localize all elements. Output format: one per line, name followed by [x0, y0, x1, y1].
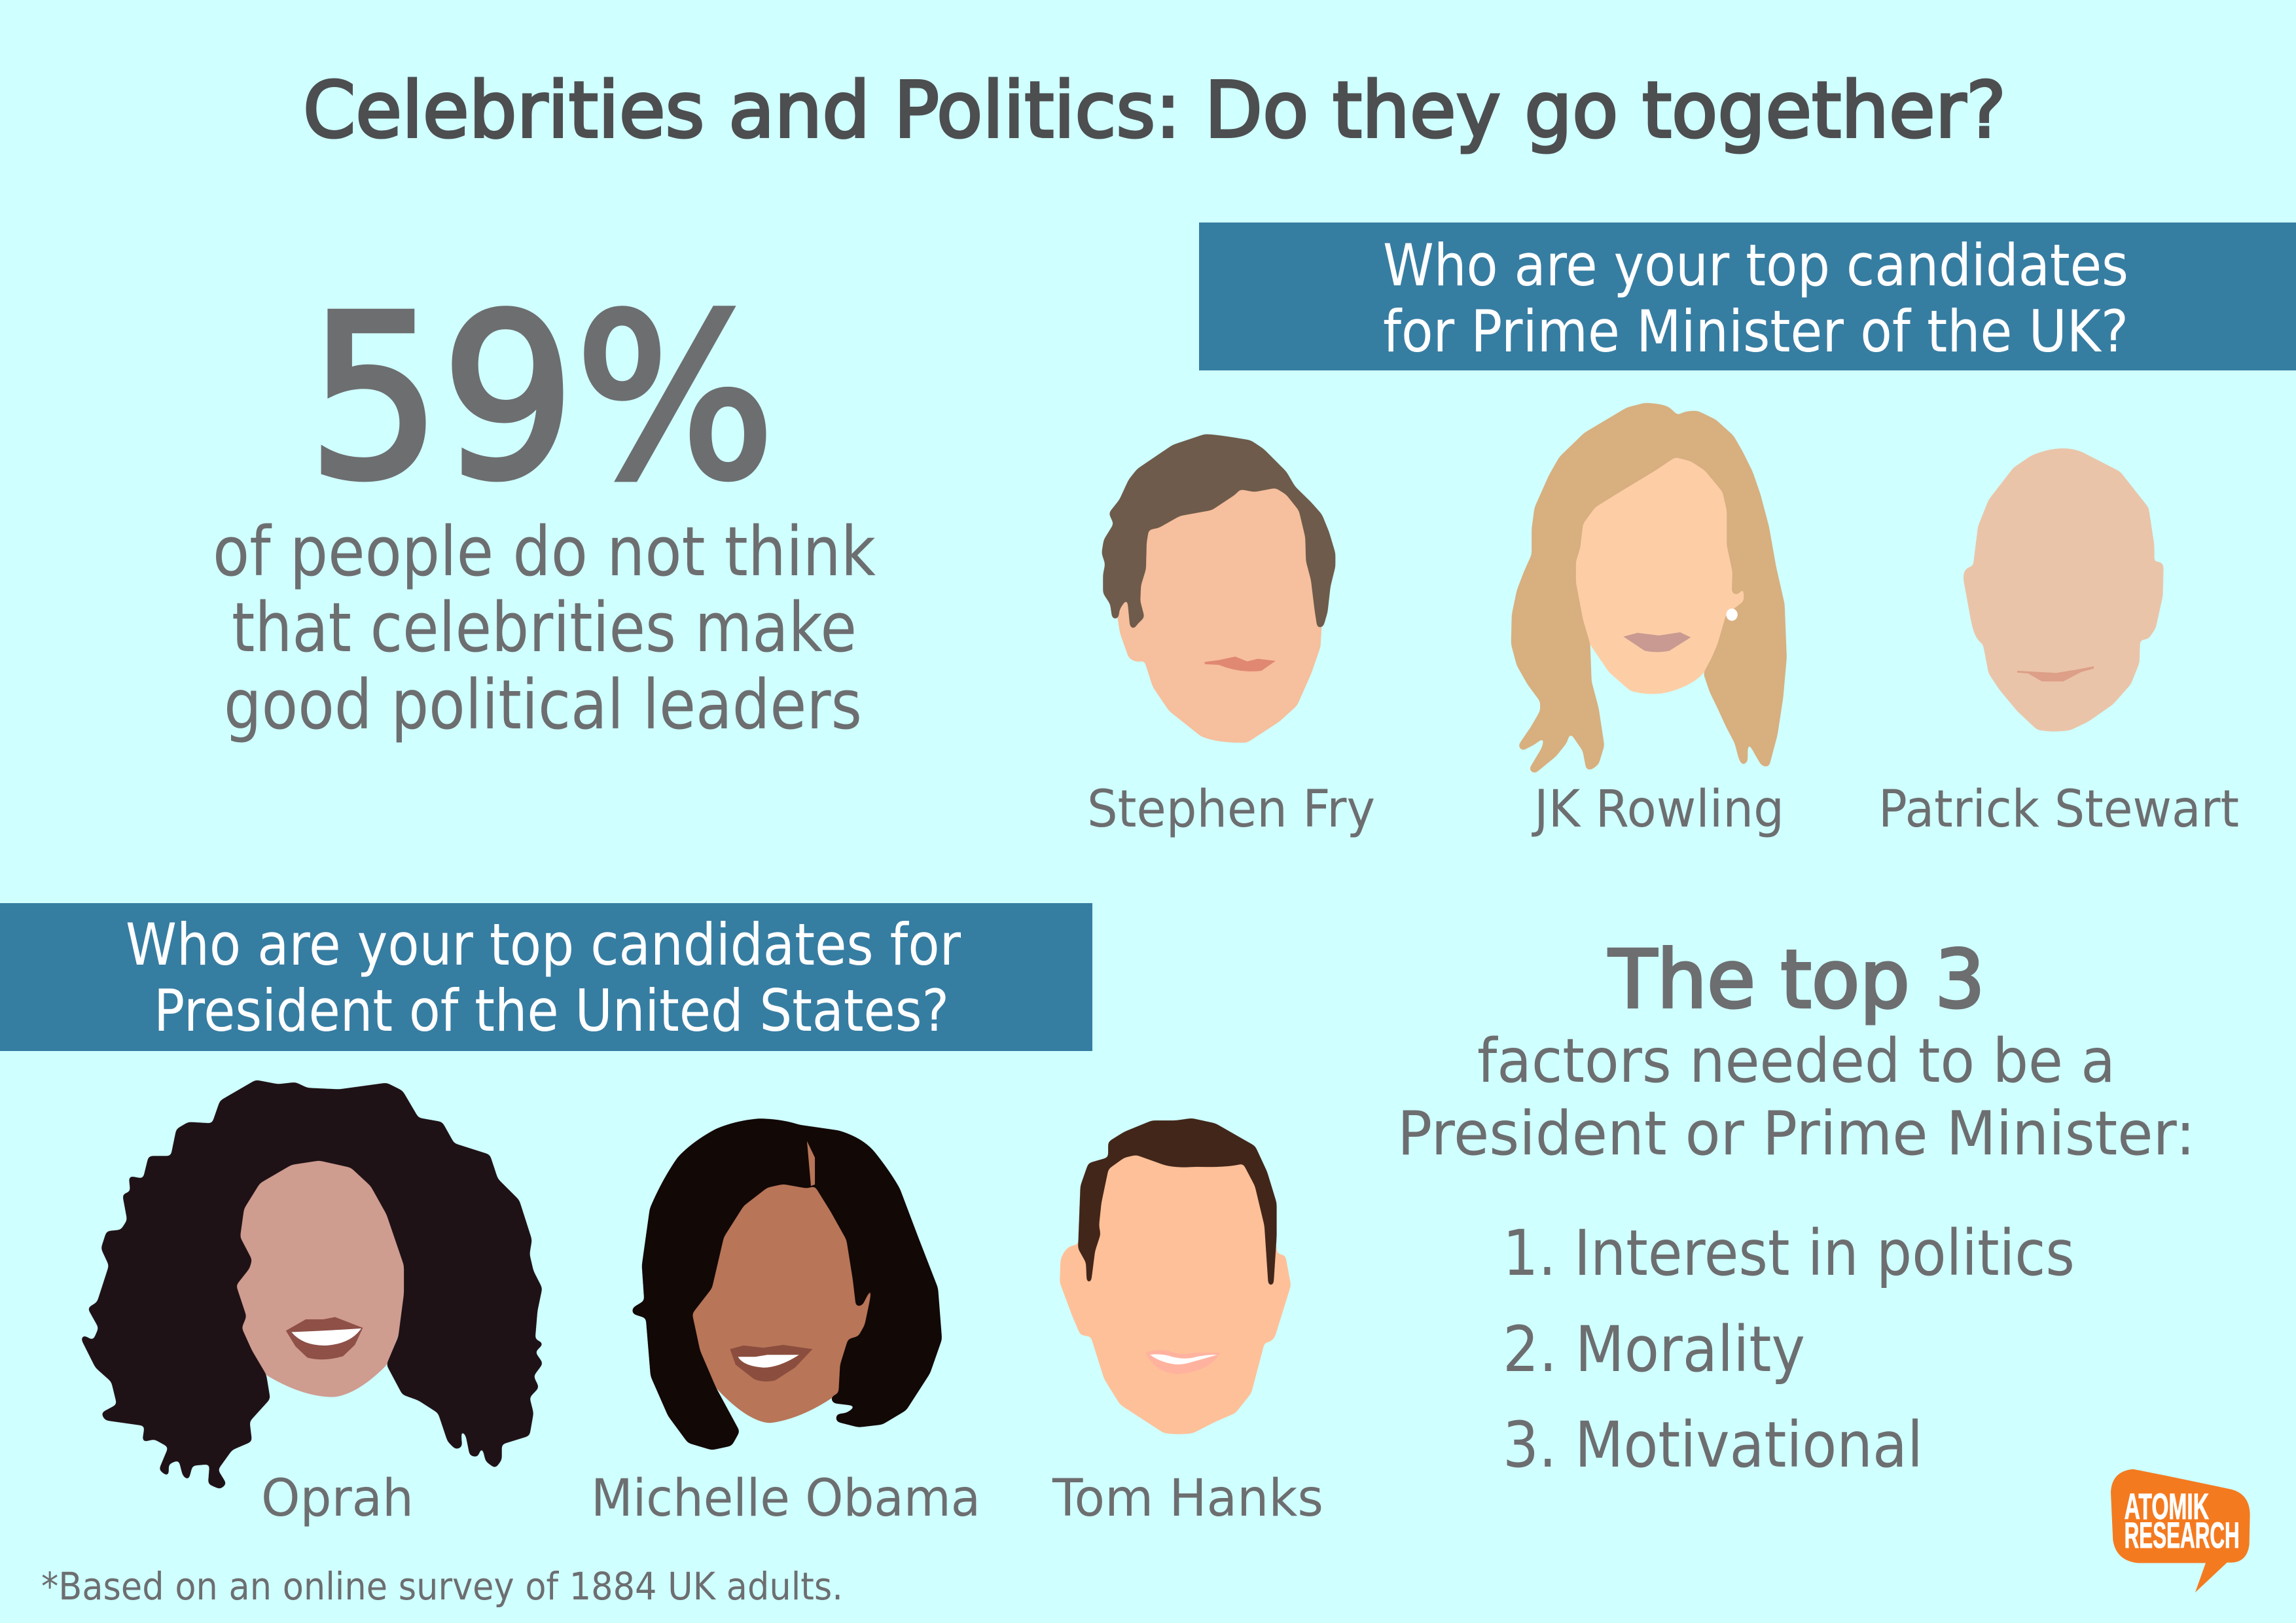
- logo: Atomik Research: [2111, 1469, 2250, 1592]
- names: Prime Minister candidates: JK Rowling: [1531, 780, 1784, 839]
- portrait: Tom Hanks: [1060, 1118, 1291, 1434]
- panel: Prime Minister candidates: [1087, 223, 2296, 839]
- banner: Prime Minister question: for Prime Minister of the UK?: [1383, 298, 2128, 365]
- statistic description: [213, 512, 876, 745]
- footnote: *Based on an online survey of 1884 UK adults.: [41, 1564, 843, 1609]
- big number: 59%: [308, 268, 775, 529]
- logo: Atomik Research: ATOMIK: [2125, 1486, 2209, 1527]
- names: Prime Minister candidates: [1087, 780, 2239, 839]
- factors intro text: factors needed to be a: [1477, 1026, 2115, 1096]
- banner: President question: President of the United States?: [154, 977, 949, 1044]
- banner: Prime Minister question: Who are your top candidates: [1383, 232, 2128, 299]
- names: Prime Minister candidates: Stephen Fry: [1087, 780, 1375, 839]
- factors list: 1. Interest in politics: [1503, 1217, 2075, 1290]
- names: President candidates: Michelle Obama: [591, 1469, 980, 1528]
- statistic description: good political leaders: [224, 665, 862, 745]
- panel: top 3 factors: [1397, 933, 2195, 1482]
- banner: President question: Who are your top candidates for: [126, 911, 961, 978]
- portrait: Michelle Obama: [632, 1118, 942, 1450]
- statistic description: that celebrities make: [232, 588, 857, 668]
- panel: President candidates: [0, 903, 1323, 1528]
- names: President candidates: [261, 1469, 1323, 1528]
- banner: President question: [0, 903, 1092, 1051]
- factors list: [1503, 1217, 2075, 1482]
- factors intro text: [1397, 1026, 2195, 1169]
- names: President candidates: Tom Hanks: [1052, 1469, 1323, 1528]
- portrait: Patrick Stewart: [1964, 448, 2163, 731]
- heading: The top 3: The top 3: [1608, 933, 1985, 1026]
- title: Celebrities and Politics: Do they go together?: [303, 65, 2006, 155]
- panel: 59% statistic: [213, 268, 876, 745]
- banner: Prime Minister question: [1199, 223, 2296, 370]
- portrait: JK Rowling: [1511, 403, 1787, 774]
- factors list: 3. Motivational: [1503, 1408, 1923, 1482]
- portrait: Stephen Fry: [1102, 435, 1335, 743]
- names: Prime Minister candidates: Patrick Stewart: [1878, 780, 2239, 839]
- names: President candidates: Oprah: [261, 1469, 414, 1528]
- statistic description: of people do not think: [213, 512, 876, 592]
- factors list: 2. Morality: [1503, 1313, 1805, 1386]
- portrait: Oprah: [81, 1080, 544, 1489]
- factors intro text: President or Prime Minister:: [1397, 1098, 2195, 1169]
